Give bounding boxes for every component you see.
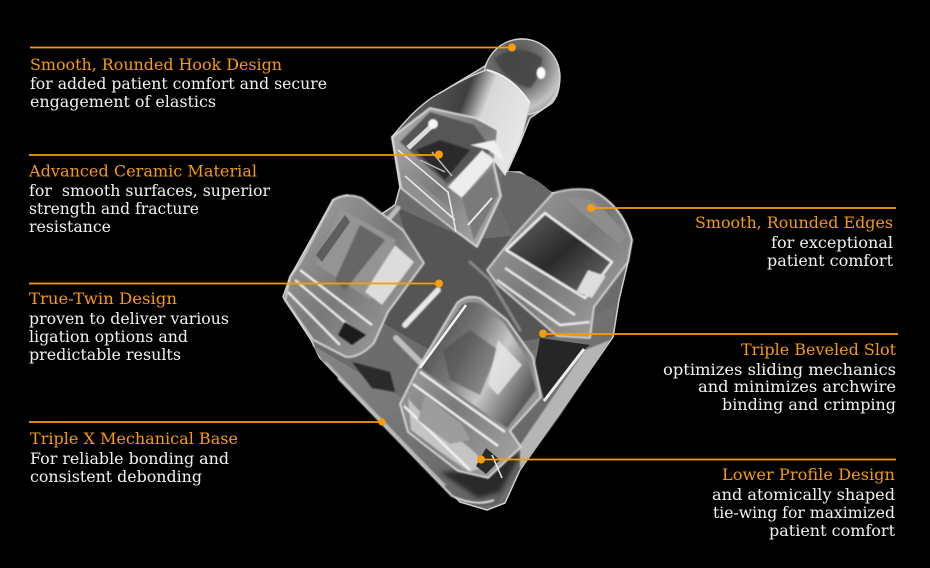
- text block: Lower Profile Design: and atomically shaped: [712, 486, 895, 504]
- text block: True-Twin Design: ligation options and: [29, 328, 188, 346]
- right wing window: [506, 213, 612, 298]
- front hook block: [392, 108, 505, 247]
- text block: True-Twin Design: proven to deliver various: [29, 310, 229, 328]
- text block: Triple Beveled Slot: and minimizes archwire: [698, 378, 896, 396]
- bracket illustration: [283, 39, 632, 510]
- back tie-wing: [498, 172, 552, 240]
- text block: Advanced Ceramic Material: strength and fracture: [29, 200, 199, 218]
- text block: True-Twin Design: [29, 290, 229, 364]
- text block: Triple Beveled Slot: binding and crimping: [722, 396, 896, 414]
- text block: Lower Profile Design: tie-wing for maximized: [713, 504, 895, 522]
- leader line: ceramic material: [29, 150, 443, 158]
- leader line: true-twin: [29, 280, 443, 288]
- text block: Triple Beveled Slot: Triple Beveled Slot: [741, 341, 897, 359]
- front wing lower pad: [408, 398, 485, 472]
- front lower tie-wing: [400, 297, 541, 478]
- text block: Advanced Ceramic Material: [28, 162, 271, 236]
- leader line: hook: [30, 44, 516, 52]
- leader line: beveled slot: [539, 330, 898, 338]
- text block: Triple X Mechanical Base: consistent debonding: [30, 468, 202, 486]
- text block: Triple Beveled Slot: optimizes sliding mechanics: [663, 361, 896, 379]
- hook stem: [392, 70, 530, 175]
- leader line: rounded edges: [587, 204, 896, 212]
- text block: Triple X Mechanical Base: For reliable bonding and: [30, 450, 229, 468]
- text block: Smooth, Rounded Edges: patient comfort: [767, 252, 894, 270]
- text block: Triple X Mechanical Base: Triple X Mechanical Base: [30, 430, 238, 448]
- left tie-wing: [285, 195, 424, 357]
- text block: Smooth, Rounded Edges: for exceptional: [771, 234, 893, 252]
- text block: Lower Profile Design: patient comfort: [769, 522, 896, 540]
- text block: Triple X Mechanical Base: [30, 430, 238, 486]
- bracket silhouette: [283, 39, 632, 510]
- text block: Triple Beveled Slot: [663, 341, 897, 414]
- centre slot highlights: [381, 208, 520, 362]
- text block: Smooth, Rounded Hook Design: [30, 56, 327, 111]
- leader line: lower profile: [477, 456, 896, 464]
- hook ball: [484, 39, 560, 115]
- leader line: mechanical base: [29, 418, 386, 426]
- front wing window: [420, 302, 536, 428]
- text block: Smooth, Rounded Edges: [695, 214, 894, 270]
- text block: Advanced Ceramic Material: resistance: [29, 218, 111, 236]
- text block: Lower Profile Design: [712, 466, 896, 540]
- text block: Smooth, Rounded Hook Design: engagement of elastics: [30, 93, 216, 111]
- text block: Advanced Ceramic Material: Advanced Ceramic Material: [28, 162, 257, 180]
- text block: True-Twin Design: True-Twin Design: [29, 290, 177, 308]
- bracket base plate: [312, 305, 616, 506]
- text block: Smooth, Rounded Hook Design: for added patient comfort and secure: [30, 75, 327, 93]
- hook neck ring: [487, 70, 530, 103]
- right tie-wing: [487, 189, 632, 338]
- text block: Smooth, Rounded Edges: Smooth, Rounded Edges: [695, 214, 893, 232]
- text block: True-Twin Design: predictable results: [29, 346, 181, 364]
- centre channel: [378, 208, 560, 350]
- triple beveled slot area: [535, 338, 590, 402]
- text block: Smooth, Rounded Hook Design: Smooth, Rounded Hook Design: [30, 56, 282, 74]
- slot bright bar: [544, 349, 584, 401]
- text block: Advanced Ceramic Material: for smooth surfaces, superior: [29, 182, 271, 200]
- text block: Lower Profile Design: Lower Profile Design: [722, 466, 895, 484]
